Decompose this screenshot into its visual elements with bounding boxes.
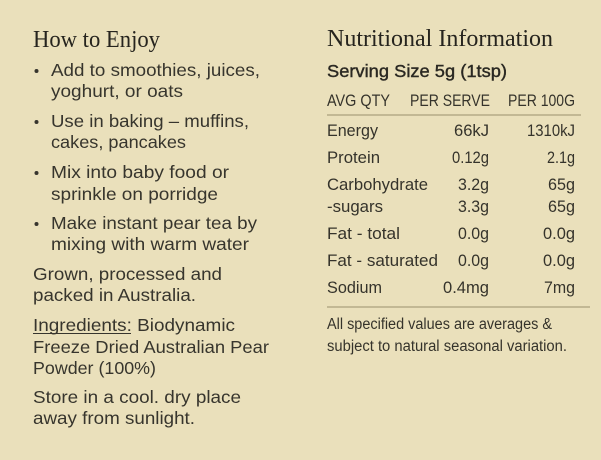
bullet item: baby food xyxy=(34,162,229,204)
bullet item: pear tea: Make instant pear tea by xyxy=(51,213,257,233)
row: fat saturated: 0.0g xyxy=(543,251,575,270)
text block: origin xyxy=(33,264,222,305)
row: fat saturated xyxy=(327,251,575,270)
text block: origin: Grown, processed and xyxy=(33,264,222,284)
heading: how to enjoy: How to Enjoy xyxy=(33,27,160,53)
row: fat total: 0.0g xyxy=(458,224,489,243)
row: fat saturated: Fat - saturated xyxy=(327,251,438,270)
heading: nutritional information: Nutritional Information xyxy=(327,26,553,52)
panel: how to enjoy xyxy=(33,27,269,428)
text block: ingredients: Ingredients: Biodynamic xyxy=(33,315,235,335)
row: fat total xyxy=(327,224,575,243)
text block: storage: Store in a cool. dry place xyxy=(33,387,241,407)
row: sodium: 7mg xyxy=(544,278,575,297)
bullet item: smoothies xyxy=(34,60,260,101)
row: energy: 66kJ xyxy=(454,121,489,140)
row: energy xyxy=(327,121,575,140)
panel: nutritional information xyxy=(327,26,590,355)
subheading: serving size: Serving Size 5g (1tsp) xyxy=(327,61,507,81)
footnote: subject to natural seasonal variation. xyxy=(327,338,567,355)
text block: storage xyxy=(33,387,241,428)
row: fat total: 0.0g xyxy=(543,224,575,243)
row: protein: 2.1g xyxy=(547,148,575,167)
table header xyxy=(327,91,575,110)
row: sodium: 0.4mg xyxy=(443,278,489,297)
bullet item: smoothies: Add to smoothies, juices, xyxy=(51,60,260,80)
text block: ingredients: Freeze Dried Australian Pear xyxy=(33,337,269,357)
bullet item: baking xyxy=(34,111,249,152)
row: carbohydrate: Carbohydrate xyxy=(327,175,428,194)
row: protein: Protein xyxy=(327,148,380,167)
row: energy: 1310kJ xyxy=(527,121,575,140)
row: fat saturated: 0.0g xyxy=(458,251,489,270)
table header: PER SERVE xyxy=(410,91,490,110)
row: protein: 0.12g xyxy=(452,148,489,167)
row: carbohydrate xyxy=(327,175,575,194)
row: sugars xyxy=(327,197,575,216)
row: sodium: Sodium xyxy=(327,278,382,297)
row: sugars: 65g xyxy=(548,197,575,216)
table header: PER 100G xyxy=(508,91,575,110)
row: sodium xyxy=(327,278,575,297)
row: carbohydrate: 65g xyxy=(548,175,575,194)
row: sugars: 3.3g xyxy=(458,197,489,216)
footnote xyxy=(327,316,567,355)
footnote: All specified values are averages & xyxy=(327,316,553,333)
bullet item: baby food: sprinkle on porridge xyxy=(51,184,218,204)
bullet item: pear tea xyxy=(34,213,257,254)
text block: ingredients: Powder (100%) xyxy=(33,358,156,378)
bullet item: pear tea: mixing with warm water xyxy=(51,234,249,254)
text block: ingredients xyxy=(33,315,269,378)
bullet item: baby food: Mix into baby food or xyxy=(51,162,229,182)
row: energy: Energy xyxy=(327,121,378,140)
bullet item: smoothies: yoghurt, or oats xyxy=(51,81,183,101)
row: protein xyxy=(327,148,575,167)
text block: storage: away from sunlight. xyxy=(33,408,195,428)
bullet item: baking: cakes, pancakes xyxy=(51,132,186,152)
row: fat total: Fat - total xyxy=(327,224,400,243)
text block: origin: packed in Australia. xyxy=(33,285,196,305)
row: sugars: -sugars xyxy=(327,197,383,216)
row: carbohydrate: 3.2g xyxy=(458,175,489,194)
table header: AVG QTY xyxy=(327,91,390,110)
bullet item: baking: Use in baking – muffins, xyxy=(51,111,249,131)
list: serving suggestions xyxy=(34,60,260,254)
